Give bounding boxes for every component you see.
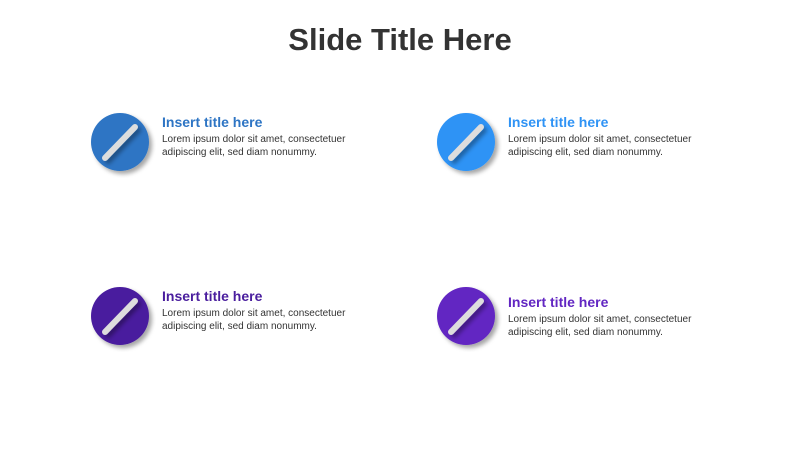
item: top right [437,113,692,176]
title: Slide Title Here [288,22,512,57]
text: adipiscing elit, sed diam nonummy. [162,321,317,332]
item: bottom left [91,287,346,350]
text: Lorem ipsum dolor sit amet, consectetuer [162,134,345,145]
text: Lorem ipsum dolor sit amet, consectetuer [162,308,345,319]
text: Lorem ipsum dolor sit amet, consectetuer [508,134,691,145]
item: bottom right [437,287,692,350]
heading: Insert title here [162,288,262,304]
text [508,134,692,158]
icon: light blue circle [437,113,500,176]
text: adipiscing elit, sed diam nonummy. [162,147,317,158]
text: Lorem ipsum dolor sit amet, consectetuer [508,314,691,325]
icon: dark purple circle [91,287,154,350]
text: adipiscing elit, sed diam nonummy. [508,327,663,338]
text [162,308,346,332]
icon: purple circle [437,287,500,350]
text: adipiscing elit, sed diam nonummy. [508,147,663,158]
icon: blue circle [91,113,154,176]
text [508,314,692,338]
heading: Insert title here [508,294,608,310]
heading: Insert title here [508,114,608,130]
item: top left [91,113,346,176]
heading: Insert title here [162,114,262,130]
text [162,134,346,158]
